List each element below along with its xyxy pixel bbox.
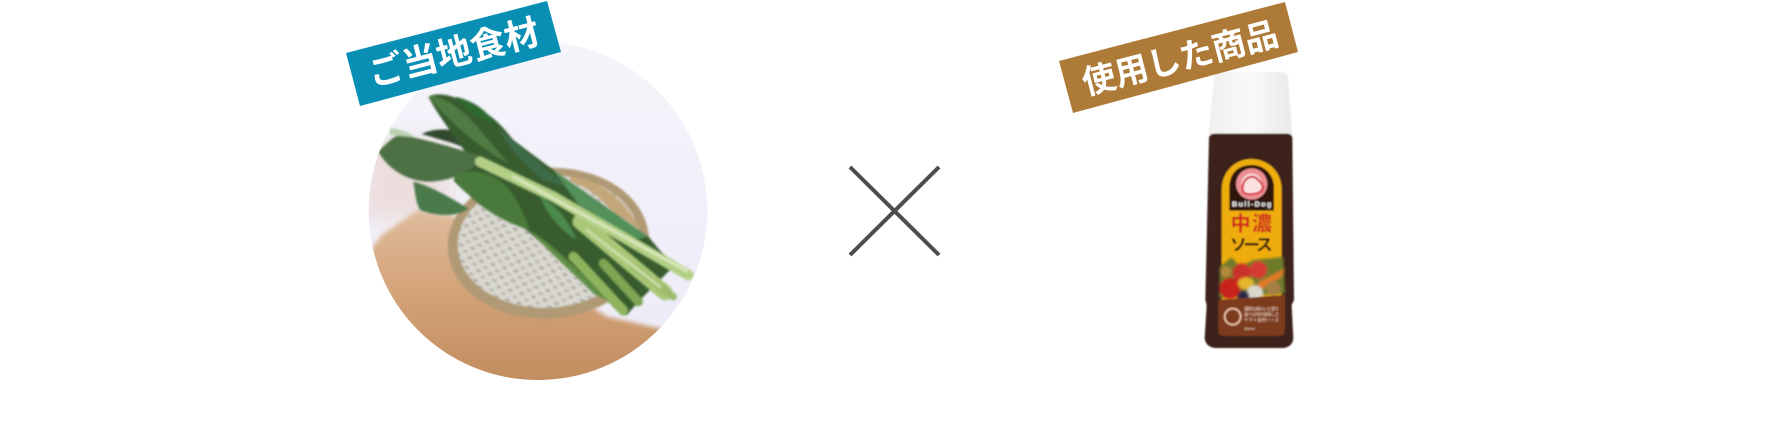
yellow label [1222, 159, 1282, 300]
bottle body [1205, 134, 1294, 348]
vegetables [1219, 257, 1285, 303]
logo [1229, 165, 1274, 211]
product name: 中濃 [1231, 213, 1272, 236]
lower label panel [1218, 295, 1285, 336]
stems [480, 162, 688, 311]
bamboo basket [447, 166, 650, 320]
greens [378, 94, 673, 315]
product name: ソース [1230, 236, 1273, 255]
product name [1230, 213, 1273, 255]
lower label panel: 濃厚な味わいと香り [1244, 306, 1279, 313]
banner: product used [1059, 2, 1298, 113]
banner: product used: 使用した商品 [1078, 16, 1282, 103]
banner: local ingredient [346, 1, 561, 106]
banner: local ingredient: ご当地食材 [365, 13, 544, 94]
photo: komatsuna greens on a bamboo basket [368, 43, 708, 380]
lower label panel: ヤマト食材ソース [1244, 316, 1279, 323]
sauce bottle [1205, 72, 1294, 348]
bottle cap [1208, 72, 1292, 135]
logo: Bull-Dog [1232, 200, 1271, 209]
lower label panel: 300ml [1244, 326, 1255, 331]
infographic canvas [346, 1, 1298, 380]
lower label panel: 食べる時の美味しさ [1244, 311, 1279, 318]
multiply symbol [850, 167, 939, 255]
